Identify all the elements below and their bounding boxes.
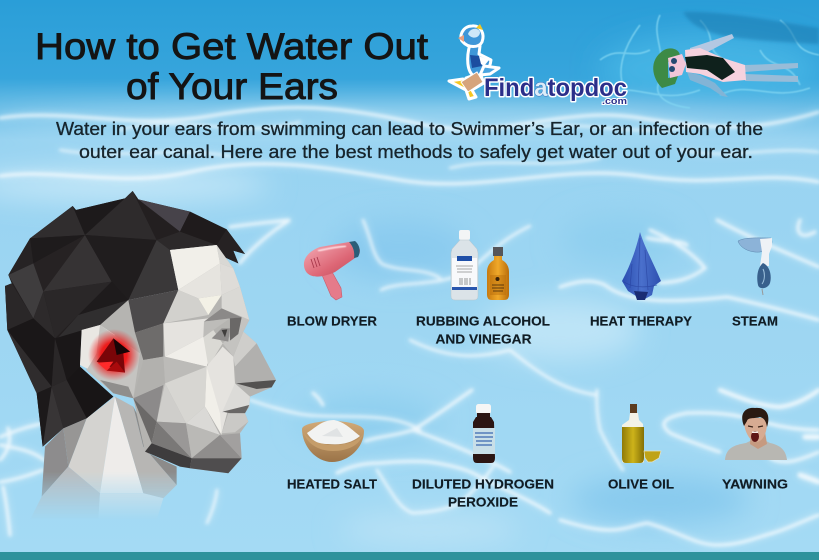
label: heated salt: HEATED SALT <box>287 476 377 492</box>
neck <box>30 397 177 520</box>
label: steam: STEAM <box>732 314 778 328</box>
label: diluted hydrogen peroxide: DILUTED HYDROGEN <box>412 476 554 492</box>
item: diluted hydrogen peroxide <box>412 404 554 510</box>
icon: garment steamer <box>738 238 772 295</box>
icon: vinegar bottle <box>487 247 509 300</box>
footer bar <box>0 552 819 560</box>
title: How to Get Water Out <box>35 26 429 67</box>
item: heat therapy <box>590 232 692 328</box>
label: rubbing alcohol and vinegar: AND VINEGAR <box>436 332 532 346</box>
item: olive oil <box>608 404 674 492</box>
item: blow dryer <box>287 241 378 328</box>
title: of Your Ears <box>126 66 338 107</box>
label: blow dryer: BLOW DRYER <box>287 314 378 328</box>
icon: olive oil bottle and dish <box>622 404 661 463</box>
ear <box>80 325 140 398</box>
face <box>82 245 276 473</box>
title <box>35 26 429 107</box>
label: rubbing alcohol and vinegar <box>416 314 550 346</box>
icon: blow dryer <box>304 241 360 300</box>
hair <box>5 191 245 447</box>
item: heated salt <box>287 420 377 492</box>
label: yawning: YAWNING <box>722 476 788 492</box>
item: yawning <box>722 408 788 492</box>
logo .com: .com <box>602 96 627 107</box>
label: olive oil: OLIVE OIL <box>608 476 674 492</box>
eye <box>203 308 242 342</box>
icon: swimmer <box>653 34 798 97</box>
label: diluted hydrogen peroxide: PEROXIDE <box>448 494 518 510</box>
item: rubbing alcohol and vinegar <box>416 230 550 346</box>
label: diluted hydrogen peroxide <box>412 476 554 510</box>
intro text <box>56 119 763 162</box>
logo: Findatopdoc <box>449 24 627 107</box>
label: heat therapy: HEAT THERAPY <box>590 314 692 328</box>
intro text: Water in your ears from swimming can lead to Swimmer’s Ear, or an infection of the <box>56 119 763 139</box>
low-poly head with inflamed ear <box>5 191 276 520</box>
icon: blue towel <box>622 232 661 300</box>
icon: peroxide bottle <box>473 404 495 463</box>
icon: bowl of salt <box>302 420 364 462</box>
pool corner with swimmer <box>600 12 819 108</box>
item: steam <box>732 238 778 328</box>
logo wordmark: Findatopdoc <box>484 74 627 102</box>
icon: duck mascot <box>449 24 499 99</box>
icon: yawning man <box>725 408 787 460</box>
icon: rubbing alcohol bottle <box>451 230 478 300</box>
label: rubbing alcohol and vinegar: RUBBING ALCOHOL <box>416 314 550 328</box>
intro text: outer ear canal. Here are the best methods to safely get water out of your ear. <box>79 142 753 162</box>
